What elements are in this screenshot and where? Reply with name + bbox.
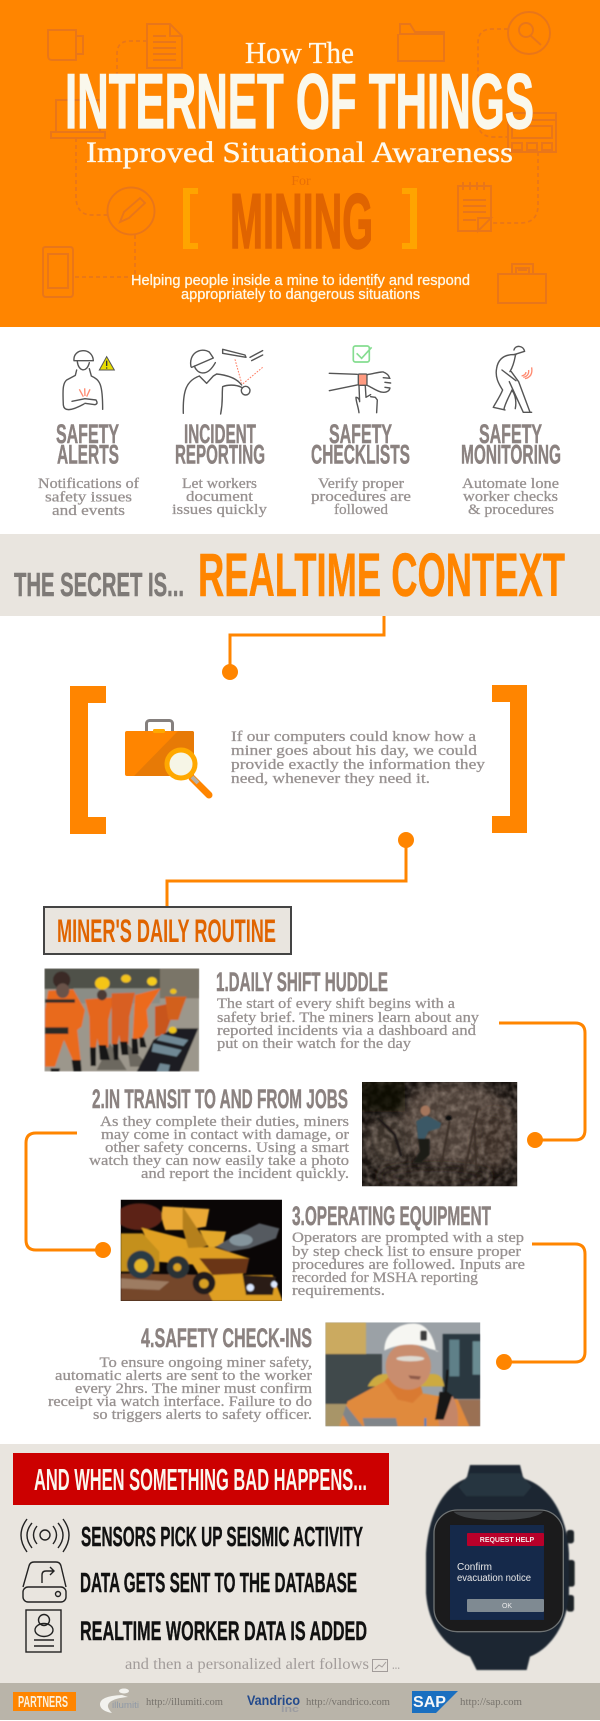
title: improved situational awareness: Improved Situational Awareness <box>86 136 513 169</box>
text: step 1: safety brief. The miners learn about any <box>217 1010 480 1026</box>
text: step 1: reported incidents via a dashboard and <box>217 1023 477 1039</box>
logo: sap: SAP <box>413 1694 446 1711</box>
badge: partners <box>13 1692 76 1711</box>
logo: illumiti: illumiti <box>112 1700 139 1710</box>
text: safety monitoring description <box>462 476 559 518</box>
photo: mining equipment <box>116 1200 283 1301</box>
heading: safety monitoring: SAFETY <box>479 419 542 449</box>
photo: shift huddle <box>44 968 199 1072</box>
heading: incident reporting: INCIDENT <box>184 419 256 449</box>
text: safety monitoring description: & procedures <box>468 502 554 518</box>
icon: worker reporting incident <box>183 349 263 414</box>
text: step 3 <box>292 1230 525 1299</box>
text: safety checklists description <box>311 476 411 518</box>
text: step 1 <box>217 996 480 1052</box>
text: context paragraph: If our computers could know how a <box>231 729 476 745</box>
text: confirm evacuation <box>457 1562 531 1584</box>
panel: context callout <box>70 685 527 834</box>
button: ok <box>467 1599 544 1612</box>
image: smart watch <box>426 1465 575 1670</box>
text: step 4: automatic alerts are sent to the worker <box>55 1368 312 1384</box>
text: incident reporting description <box>172 476 268 518</box>
text: step 2: other safety concerns. Using a smart <box>105 1140 350 1156</box>
text: alert follows: and then a personalized alert follows <box>125 1656 369 1673</box>
text: step 2: As they complete their duties, miners <box>100 1114 349 1130</box>
text: step 3: by step check list to ensure proper <box>292 1244 521 1260</box>
icon: checklist on watch <box>329 346 391 413</box>
text: incident reporting description: issues quickly <box>172 502 268 518</box>
text: safety alerts description <box>38 476 139 519</box>
heading: safety alerts: SAFETY <box>56 419 119 449</box>
text: context paragraph: provide exactly the information they <box>231 757 486 773</box>
button: ok: OK <box>502 1603 512 1610</box>
arrow: step 3 to 4 <box>496 1244 585 1370</box>
link: illumiti: http://illumiti.com <box>146 1696 223 1708</box>
text: step 2 <box>89 1114 350 1182</box>
text: step 2: may come in contact with damage, or <box>101 1127 349 1143</box>
subtitle: Helping people inside a mine to identify and respond <box>131 272 470 289</box>
logo: vandrico: Inc <box>281 1704 299 1714</box>
panel: step 2 <box>89 1082 517 1186</box>
heading: safety alerts <box>56 419 119 470</box>
arrow: step 1 to 2 <box>499 1023 585 1148</box>
heading: the secret is: THE SECRET IS... <box>14 566 184 603</box>
panel: when something bad happens <box>0 1444 600 1683</box>
heading: step 2: 2.IN TRANSIT TO AND FROM JOBS <box>92 1084 348 1114</box>
text: context paragraph: need, whenever they need it. <box>231 771 430 787</box>
photo: miner with radio <box>325 1322 480 1426</box>
text: step 4: receipt via watch interface. Failure to do <box>48 1394 312 1410</box>
text: incident reporting description: document <box>186 489 254 505</box>
logo: illumiti <box>100 1688 139 1713</box>
banner: and when something bad happens <box>13 1453 389 1505</box>
badge: partners: PARTNERS <box>18 1694 68 1711</box>
photo: miner in tunnel <box>362 1082 517 1186</box>
arrow: connector to routine <box>167 832 414 906</box>
title: mining: MINING <box>230 177 373 265</box>
heading: miner's daily routine: MINER'S DAILY ROUTINE <box>57 913 276 949</box>
panel: step 1 <box>44 967 480 1072</box>
panel: secret band <box>0 534 600 616</box>
right bracket <box>492 685 527 833</box>
text: safety alerts description: and events <box>52 503 125 519</box>
button: request help <box>467 1533 544 1546</box>
heading: safety checklists <box>311 419 410 470</box>
text: confirm evacuation: Confirm <box>457 1562 492 1573</box>
text: safety alerts description: Notifications of <box>38 476 139 492</box>
background line icons <box>43 12 556 303</box>
heading: incident reporting <box>175 419 265 470</box>
logo: sap <box>412 1691 458 1713</box>
panel: use cases <box>38 346 561 519</box>
text: step 2: watch they can now easily take a photo <box>89 1153 349 1169</box>
text: step 3: requirements. <box>292 1283 385 1299</box>
logo: vandrico <box>247 1692 300 1714</box>
text: safety monitoring description: worker checks <box>463 489 558 505</box>
text: step 4: To ensure ongoing miner safety, <box>100 1355 312 1371</box>
icon: sensor signal <box>21 1519 69 1552</box>
arrow: step 2 to 3 <box>26 1133 111 1258</box>
logo: vandrico: Vandrico <box>247 1692 300 1708</box>
title: how the: How The <box>245 35 354 70</box>
text: step 1: The start of every shift begins with a <box>217 996 455 1012</box>
text: incident reporting description: Let workers <box>182 476 257 492</box>
text: confirm evacuation: evacuation notice <box>457 1573 531 1584</box>
text: safety checklists description: procedures are <box>311 489 411 505</box>
heading: safety checklists: SAFETY <box>329 419 392 449</box>
heading: step 1: 1.DAILY SHIFT HUDDLE <box>216 967 388 997</box>
text: step 4: every 2hrs. The miner must confirm <box>75 1381 312 1397</box>
panel: step 3 <box>116 1200 525 1301</box>
heading: step 4: 4.SAFETY CHECK-INS <box>141 1323 312 1353</box>
heading: incident reporting: REPORTING <box>175 440 265 470</box>
panel: header <box>0 0 600 327</box>
subtitle <box>131 272 470 303</box>
link: sap: http://sap.com <box>460 1696 522 1708</box>
text: step 3: Operators are prompted with a step <box>292 1230 524 1246</box>
text: safety alerts description: safety issues <box>45 490 132 506</box>
right bracket <box>402 188 417 249</box>
text: step 4 <box>48 1355 312 1423</box>
text: safety checklists description: Verify proper <box>318 476 404 492</box>
heading: safety monitoring <box>461 419 561 470</box>
icon: small chart <box>372 1660 388 1672</box>
button: request help: REQUEST HELP <box>480 1537 535 1544</box>
icon: database drive <box>23 1562 66 1602</box>
icon: worker card <box>26 1610 61 1652</box>
icon: briefcase with magnifier <box>125 720 209 795</box>
text: step 4: so triggers alerts to safety officer. <box>93 1407 312 1423</box>
text: step 1: put on their watch for the day <box>217 1036 412 1052</box>
link: vandrico: http://vandrico.com <box>306 1696 390 1708</box>
text: sensors: SENSORS PICK UP SEISMIC ACTIVITY <box>81 1521 363 1552</box>
text: step 3: recorded for MSHA reporting <box>292 1270 479 1286</box>
heading: miner's daily routine <box>44 907 291 954</box>
title: for: For <box>291 174 311 189</box>
text: step 2: and report the incident quickly. <box>141 1166 349 1182</box>
heading: safety checklists: CHECKLISTS <box>311 440 410 470</box>
heading: safety alerts: ALERTS <box>57 440 119 470</box>
arrow: connector to context <box>222 616 384 680</box>
text: safety monitoring description: Automate lone <box>462 476 559 492</box>
text: context paragraph: miner goes about his day, we could <box>231 743 478 759</box>
left bracket <box>183 188 198 249</box>
text: safety checklists description: followed <box>334 502 388 518</box>
text: worker data: REALTIME WORKER DATA IS ADDED <box>80 1616 367 1646</box>
panel: partners <box>0 1683 600 1720</box>
icon: worker receiving alert <box>63 351 114 410</box>
subtitle: appropriately to dangerous situations <box>181 286 420 303</box>
icon: lone worker with jackhammer <box>493 346 532 412</box>
panel: step 4 <box>48 1322 480 1426</box>
text: data: DATA GETS SENT TO THE DATABASE <box>80 1567 357 1598</box>
text: step 3: procedures are followed. Inputs are <box>292 1257 525 1273</box>
text: context paragraph <box>231 729 486 787</box>
left bracket <box>70 686 106 834</box>
text: ellipsis: ... <box>392 1658 400 1673</box>
